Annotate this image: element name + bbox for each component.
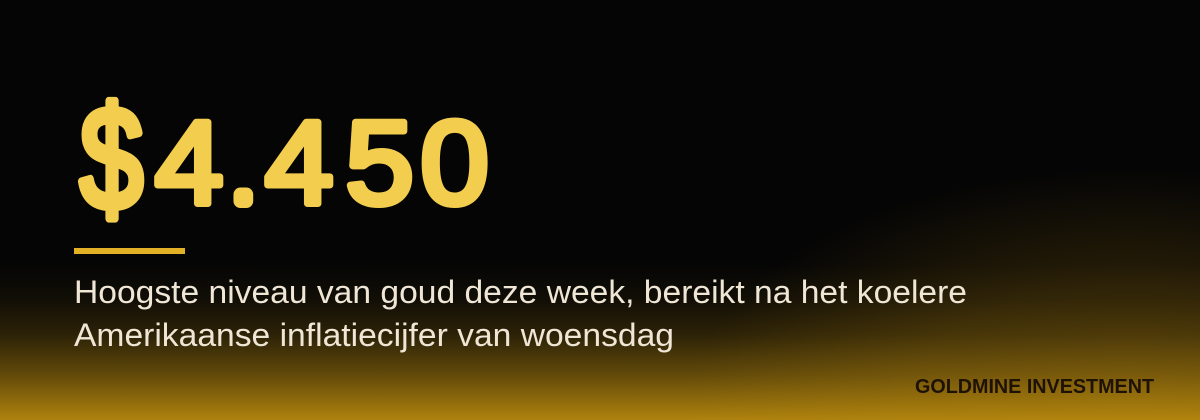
- description: [74, 274, 967, 353]
- first digit: 4: [155, 97, 223, 229]
- second four: 4: [265, 97, 333, 229]
- description line 2: Amerikaanse inflatiecijfer van woensdag: [74, 317, 674, 353]
- headline price: [80, 77, 489, 240]
- brand name: GOLDMINE INVESTMENT: [915, 376, 1154, 398]
- digit five: 5: [346, 97, 414, 229]
- decimal point: .: [235, 147, 252, 214]
- digit zero: 0: [420, 97, 489, 229]
- dollar sign: $: [80, 77, 143, 240]
- gold divider: [74, 248, 185, 254]
- description line 1: Hoogste niveau van goud deze week, bereikt na het koelere: [74, 274, 967, 310]
